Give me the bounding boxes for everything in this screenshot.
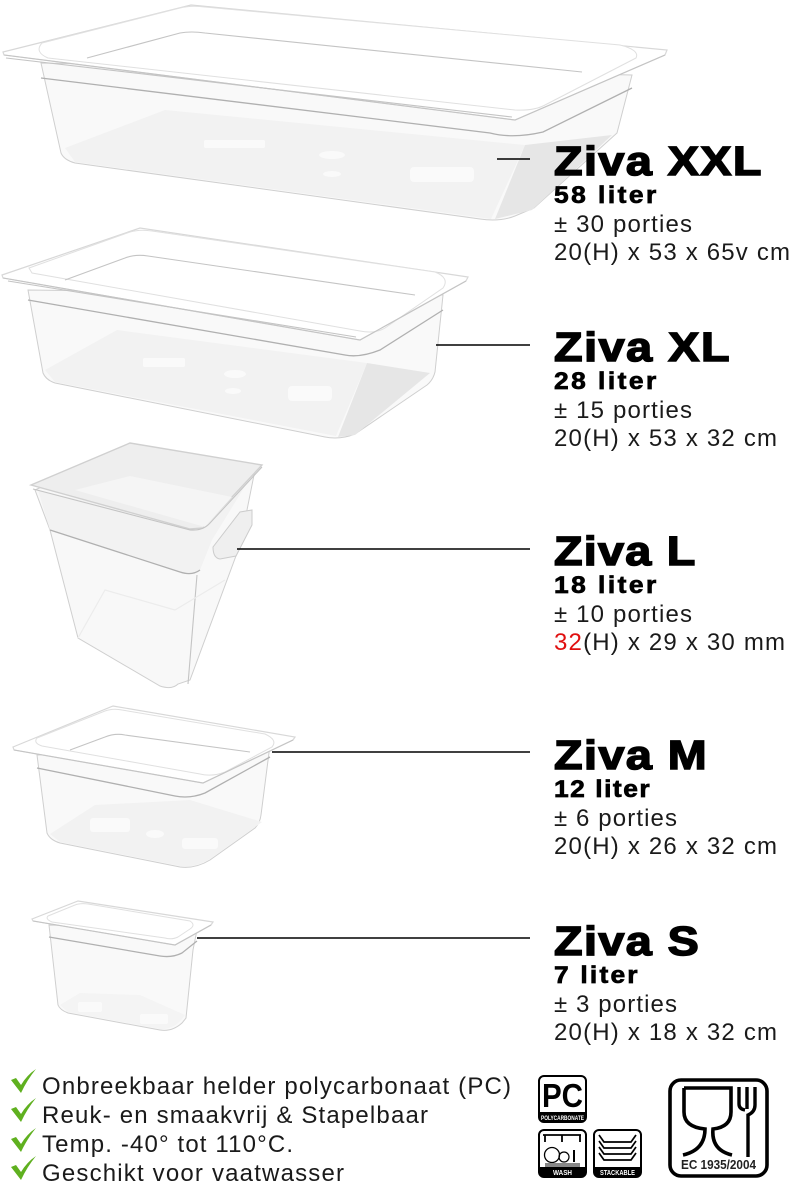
label: Ziva M: Ziva M bbox=[554, 733, 707, 778]
product image: Ziva XL tray bbox=[2, 228, 468, 438]
label: Ziva S bbox=[554, 919, 777, 1046]
icon: check mark 2 bbox=[11, 1098, 36, 1122]
icon: stackable bbox=[594, 1130, 641, 1177]
feature 1: Onbreekbaar helder polycarbonaat (PC) bbox=[42, 1073, 511, 1100]
leader line: Ziva XXL bbox=[497, 158, 530, 160]
feature 3: Temp. -40° tot 110°C. bbox=[42, 1131, 293, 1158]
icon: PC polycarbonate: POLYCARBONATE bbox=[541, 1116, 584, 1122]
leader line: Ziva XL bbox=[436, 344, 530, 346]
label: Ziva L: 18 liter bbox=[554, 572, 656, 599]
label: Ziva S: Ziva S bbox=[554, 919, 699, 964]
label: Ziva XL: 20(H) x 53 x 32 cm bbox=[554, 425, 777, 452]
label: Ziva S: 7 liter bbox=[554, 962, 638, 989]
feature 4: Geschikt voor vaatwasser bbox=[42, 1160, 344, 1187]
label: Ziva L: ± 10 porties bbox=[554, 601, 692, 628]
label: Ziva XL: ± 15 porties bbox=[554, 397, 692, 424]
label: Ziva M bbox=[554, 733, 777, 860]
product image: Ziva XXL tray bbox=[3, 5, 667, 220]
leader line: Ziva M bbox=[272, 751, 530, 753]
label: Ziva XL bbox=[554, 325, 777, 452]
leader line: Ziva S bbox=[197, 937, 530, 939]
icon: dishwasher safe: WASH bbox=[553, 1170, 572, 1177]
label: Ziva L bbox=[554, 529, 785, 656]
label: Ziva S: 20(H) x 18 x 32 cm bbox=[554, 1019, 777, 1046]
label: Ziva XXL: 58 liter bbox=[554, 182, 656, 209]
label: Ziva XL: 28 liter bbox=[554, 368, 656, 395]
fork symbol bbox=[739, 1087, 755, 1157]
product image: Ziva M tray bbox=[13, 706, 295, 867]
leader line: Ziva L bbox=[237, 548, 530, 550]
label: Ziva XXL: 20(H) x 53 x 65v cm bbox=[554, 239, 790, 266]
icon: food safe EC 1935/2004: EC 1935/2004 bbox=[681, 1158, 756, 1172]
icon: check mark 1 bbox=[11, 1069, 36, 1093]
icon: PC polycarbonate: PC bbox=[542, 1077, 583, 1114]
label: Ziva M: 12 liter bbox=[554, 776, 650, 803]
icon: check mark 3 bbox=[11, 1128, 36, 1152]
label: Ziva L: 32(H) x 29 x 30 mm bbox=[554, 629, 785, 656]
label: Ziva XXL: Ziva XXL bbox=[554, 139, 761, 184]
icon: stackable: STACKABLE bbox=[600, 1170, 635, 1177]
product image: Ziva S tray bbox=[32, 901, 213, 1030]
feature list with check marks bbox=[11, 1069, 511, 1187]
feature 2: Reuk- en smaakvrij & Stapelbaar bbox=[42, 1102, 428, 1129]
icon: dishwasher safe bbox=[539, 1130, 586, 1177]
label: Ziva XL: Ziva XL bbox=[554, 325, 730, 370]
label: Ziva M: ± 6 porties bbox=[554, 805, 677, 832]
product image: Ziva L container bbox=[31, 443, 262, 688]
icon: check mark 4 bbox=[11, 1156, 36, 1180]
label: Ziva XXL bbox=[554, 139, 790, 266]
icon: food safe EC 1935/2004 bbox=[670, 1080, 767, 1176]
label: Ziva M: 20(H) x 26 x 32 cm bbox=[554, 833, 777, 860]
label: Ziva L: Ziva L bbox=[554, 529, 695, 574]
label: Ziva S: ± 3 porties bbox=[554, 991, 677, 1018]
glass symbol bbox=[683, 1088, 732, 1155]
label: Ziva XXL: ± 30 porties bbox=[554, 211, 692, 238]
